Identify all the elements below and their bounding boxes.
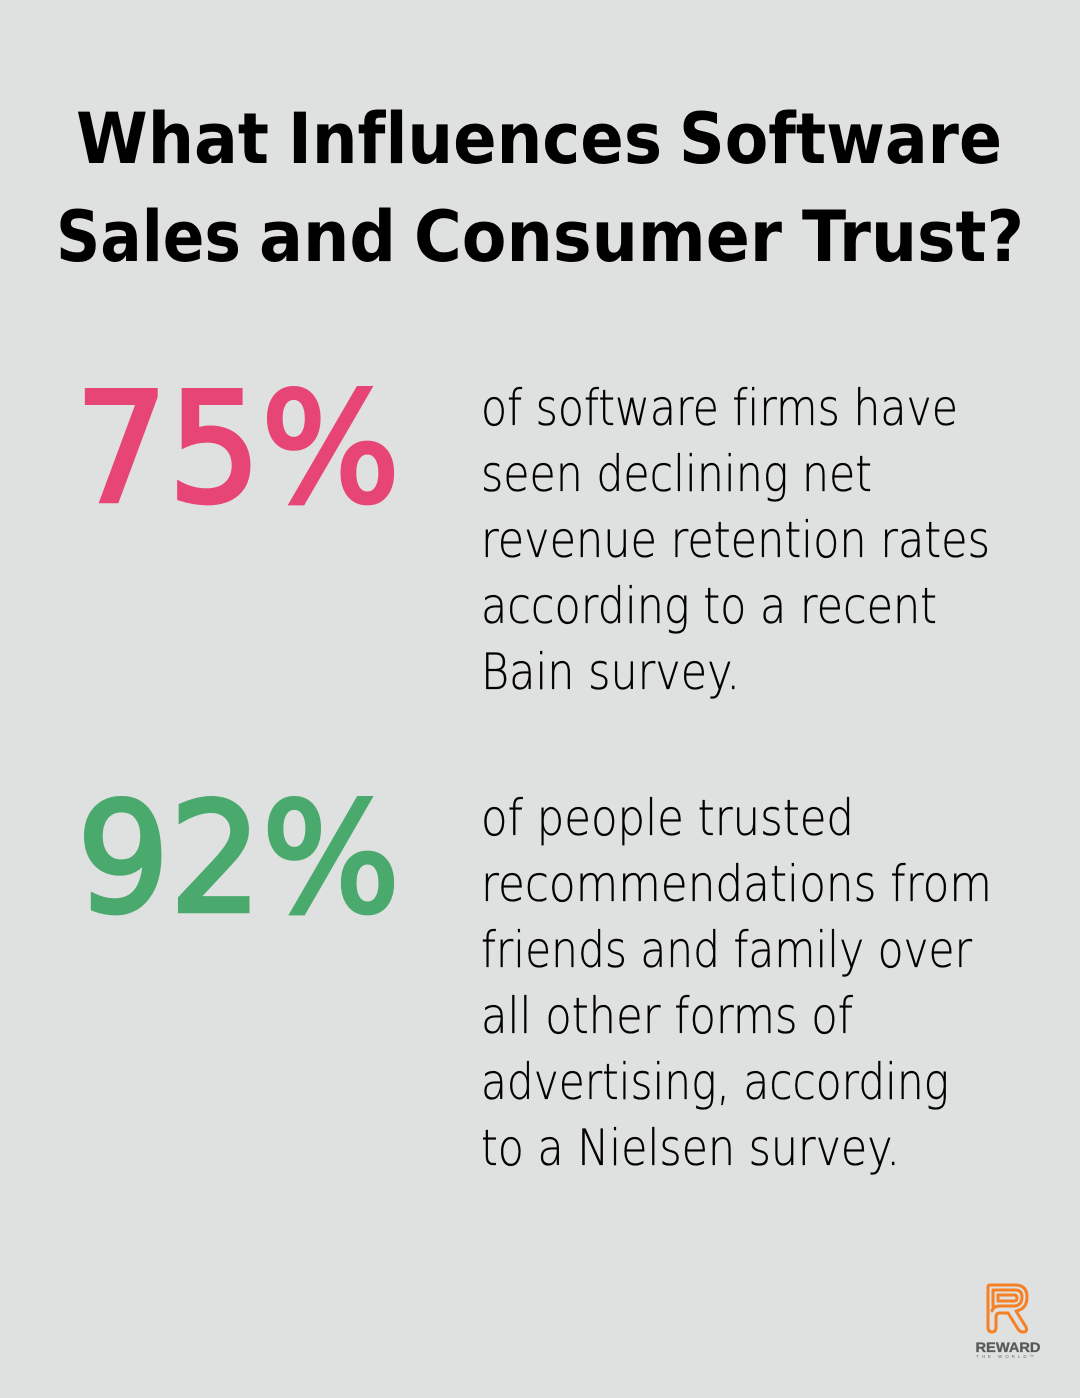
text block: 92% description: friends and family over xyxy=(481,921,972,979)
title xyxy=(56,98,1024,278)
text block: 75% description: of software firms have xyxy=(481,379,958,437)
logo: Reward the World xyxy=(976,1285,1041,1359)
title: Consumer xyxy=(414,196,782,278)
title: Influences xyxy=(288,98,662,180)
text block: 92% description: of people trusted xyxy=(481,789,854,847)
title: Sales xyxy=(56,196,241,278)
text block: 75% description: seen declining net xyxy=(481,445,872,503)
title: Trust? xyxy=(802,196,1024,278)
text block: 92% description: to a Nielsen survey. xyxy=(481,1119,900,1177)
title: What xyxy=(76,98,269,180)
text block: 75% description: according to a recent xyxy=(481,577,937,635)
icon: R mark xyxy=(988,1285,1027,1332)
stat: 92%: 92% xyxy=(77,770,400,947)
text block: 75% description xyxy=(481,379,990,701)
title: Software xyxy=(679,98,1002,180)
text block: 92% description: all other forms of xyxy=(481,987,853,1045)
text block: 92% description: advertising, according xyxy=(481,1053,949,1111)
text block: 92% description: recommendations from xyxy=(481,855,992,913)
text block: 92% description xyxy=(481,789,992,1177)
text block: 75% description: Bain survey. xyxy=(481,643,740,701)
logo tagline: THE WORLD™ xyxy=(976,1354,1034,1359)
title: and xyxy=(259,196,396,278)
text block: 75% description: revenue retention rates xyxy=(481,511,990,569)
logo wordmark: REWARD xyxy=(976,1340,1041,1355)
stat: 75%: 75% xyxy=(75,360,400,537)
